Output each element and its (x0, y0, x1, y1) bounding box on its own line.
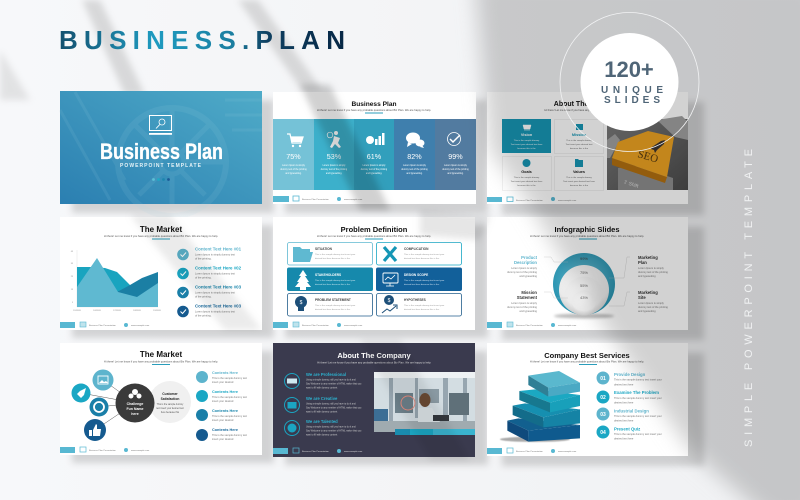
badge: 120+ unique slides (560, 12, 699, 152)
box: problem statement (288, 294, 372, 316)
card: values: This is the sample dummy (566, 176, 593, 179)
slide: infographic slides (487, 217, 688, 330)
list item 02: Content Text Here #02 (195, 266, 242, 270)
slide footer: Business Plan Presentation (302, 324, 330, 327)
label: mission statement: and typesetting (519, 309, 538, 313)
slide footer: Business Plan Presentation (516, 199, 544, 202)
label: marketing plan (638, 255, 668, 278)
slide footer: Business Plan Presentation (89, 449, 117, 452)
label: mission statement (507, 290, 538, 313)
slide heading: The Market (140, 225, 182, 234)
column 53%: dummy text of the printing (321, 168, 348, 171)
list item 03: Lorem Ipsum is simply dummy text (195, 290, 235, 294)
label: marketing site: Lorem Ipsum is simply (638, 301, 665, 305)
slide footer: www.example.com (558, 451, 576, 453)
slide shadows (72, 100, 704, 466)
slide intro: Hi there! Let me know if you have any probable questions about Biz Plan. We are happy to help. (317, 234, 431, 238)
slide footer: www.example.com (131, 325, 149, 327)
photo caption strip (395, 429, 475, 435)
slide footer: www.example.com (131, 450, 149, 452)
slide footer: www.example.com (558, 325, 576, 327)
content item 3: This is the sample dummy text (212, 414, 247, 418)
slide: company best services (487, 343, 688, 456)
card: values: Values (573, 170, 585, 174)
service 04 (596, 426, 662, 440)
box: complication: COMPLICATION (404, 247, 429, 251)
label: product description (507, 255, 538, 278)
slide footer (487, 322, 576, 328)
box: hypotheses: This is the sample dummy text insert your (404, 304, 445, 307)
list item 03 (177, 284, 242, 298)
card: vision: This is the sample dummy (514, 139, 540, 142)
card: mission: because this is the (570, 147, 589, 150)
service 02: desired text here (614, 400, 634, 404)
list item 04: Content Text Here #03 (195, 304, 242, 308)
column 61%: 61% (367, 152, 382, 161)
hub diagram: Customer (162, 392, 178, 396)
column 99%: dummy text of the printing (442, 168, 469, 171)
content item 1: insert your desired (212, 380, 234, 384)
service 04: This is the sample dummy text insert your (614, 432, 662, 436)
card: goals: This is the sample dummy (514, 176, 540, 179)
content item 2: insert your desired (212, 399, 234, 403)
slide footer (273, 196, 362, 202)
hub diagram: here because this (161, 411, 180, 414)
slide: about the company dark (273, 343, 475, 457)
card: vision: because this is the (517, 147, 536, 150)
slide: about the company cards (487, 92, 688, 204)
list item 02: of the printing. (195, 276, 212, 280)
service 01: This is the sample dummy text insert your (614, 378, 662, 382)
column 75% (273, 119, 314, 190)
slide: problem definition (273, 217, 475, 330)
feature: creative: Say Welcome to any member of HTML maker that you (306, 406, 362, 410)
content item 1: Contents Here (212, 371, 238, 375)
label: marketing plan: Marketing (638, 255, 658, 260)
column 61% (354, 119, 394, 190)
service 01 (596, 372, 662, 386)
service 03 (596, 408, 662, 422)
label: mission statement: Statement (517, 295, 538, 300)
box: problem statement: $ (300, 300, 303, 306)
slide: the market network (60, 343, 262, 455)
card: mission: This is the sample dummy (566, 139, 593, 142)
label: mission statement: dummy text of the printing (507, 305, 538, 309)
column 99% (435, 119, 476, 190)
label: mission statement: Mission (521, 290, 537, 295)
content item 4: Contents Here (212, 428, 238, 432)
feature: professional: want to fill with dummy content (306, 386, 338, 390)
area chart: 1/6/2020 (93, 310, 102, 312)
content item 2: This is the sample dummy text (212, 395, 247, 399)
column 82%: 82% (407, 152, 422, 161)
hub diagram: Fun Name (127, 407, 144, 411)
box: complication (376, 242, 462, 265)
area chart: 1/9/2020 (153, 310, 162, 312)
concentric circle chart: 99% (580, 256, 588, 261)
card: goals: because this is the (517, 184, 536, 187)
feature: talented: want to fill with dummy content (306, 434, 338, 436)
content item 3: insert your desired (212, 418, 234, 422)
hub diagram: This is the sample dummy (157, 403, 184, 406)
slide footer: Business Plan Presentation (302, 450, 330, 453)
box: stakeholders: STAKEHOLDERS (315, 273, 341, 277)
label: product description: and typesetting (519, 274, 538, 278)
content item 4: insert your desired (212, 437, 234, 441)
slide footer (487, 448, 576, 454)
content item 1: This is the sample dummy text (212, 376, 247, 380)
service 03: 03 (600, 412, 606, 418)
area chart: 15 (71, 289, 74, 291)
content item 4 (196, 428, 247, 441)
slide intro: Hi there! Let me know if you have any probable questions about Biz Plan. We are happy to help. (104, 360, 218, 364)
slide heading: About The Company (337, 351, 411, 360)
service 01: Provide Design (614, 372, 646, 377)
service 03: desired text here (614, 418, 634, 422)
slide footer (60, 322, 149, 328)
box: problem statement: desired text here because this is the. (315, 308, 351, 311)
wheel texture (60, 92, 262, 216)
column 99%: 99% (448, 152, 463, 161)
slide footer: Business Plan Presentation (516, 324, 544, 327)
column 61%: and typesetting. (366, 172, 382, 175)
card: values: Text insert your desired text here (563, 180, 596, 183)
slide heading: About The Company (554, 101, 622, 108)
service 04: Present Quiz (614, 426, 640, 432)
stacked 3D blocks (500, 371, 580, 442)
vertical tagline: SIMPLE POWERPOINT TEMPLATE (743, 149, 755, 447)
feature: talented (284, 419, 362, 436)
column 75%: and typesetting. (285, 172, 302, 175)
concentric circle chart: 43% (580, 295, 588, 300)
slide footer: www.example.com (344, 199, 362, 201)
slide intro: Hi there! Let me know if you have any probable questions about Biz Plan. (544, 108, 632, 112)
area chart: 1/8/2020 (133, 310, 142, 312)
slide footer: Business Plan Presentation (302, 198, 330, 201)
column 82%: dummy text of the printing (401, 168, 428, 171)
box: situation: SITUATION (315, 247, 333, 251)
hub diagram: text insert your desired text (156, 407, 184, 410)
concentric circle chart: 55% (580, 283, 588, 288)
column 82% (394, 119, 435, 190)
photo: SEO keyboard (607, 116, 688, 190)
hub diagram: Satisfaction (161, 397, 179, 401)
slide heading: Infographic Slides (554, 225, 620, 234)
area chart: 35 (71, 263, 74, 265)
slide intro: Hi there! Let me know if you have any probable questions about Biz Plan. We are happy to help. (530, 234, 644, 238)
feature: professional: Using a simple dummy, still you have to do it and (306, 378, 356, 382)
pagination dots (152, 178, 170, 181)
service 01: 01 (600, 376, 606, 382)
card: goals: Text insert your desired text here (511, 180, 543, 183)
feature: professional: We are Professional (306, 372, 346, 377)
list item 03: Content Text Here #03 (195, 284, 242, 290)
column 53% (314, 119, 354, 190)
slide heading: Business Plan (351, 101, 397, 108)
list item 01: Content Text Here #01 (195, 246, 242, 252)
feature: talented: Say Welcome to any member of HTML maker that you (306, 430, 362, 432)
area chart: 1/5/2020 (73, 310, 82, 312)
column 53%: 53% (327, 152, 342, 161)
service 02: 02 (600, 395, 606, 401)
service 02 (596, 390, 662, 404)
badge: 120+ unique slides: UNIQUE (601, 85, 663, 96)
column 82%: Lorem Ipsum is simply (403, 164, 427, 167)
feature: talented: We are Talented (306, 419, 338, 424)
column 53%: Lorem Ipsum is simply (323, 164, 346, 167)
label: marketing plan: and typesetting (638, 274, 656, 278)
list item 03: of the printing. (195, 294, 212, 298)
label: product description: Description (514, 260, 537, 265)
area chart (71, 250, 162, 312)
slide heading: The Market (140, 350, 182, 359)
column 61%: Lorem Ipsum is simply (363, 164, 386, 167)
slide heading: Problem Definition (341, 225, 408, 234)
service 04: 04 (600, 430, 606, 436)
photo: engineer in lab (374, 372, 475, 432)
card: goals (502, 156, 552, 190)
card: mission (554, 120, 604, 154)
label: marketing site: Marketing (638, 290, 658, 295)
content item 3 (196, 409, 247, 422)
column 75%: 75% (286, 152, 301, 161)
service 04: desired text here (614, 436, 634, 440)
content item 2: Contents Here (212, 390, 238, 394)
list item 02 (177, 266, 242, 280)
content item 1 (196, 371, 247, 384)
label: marketing plan: dummy text of the printing (638, 270, 668, 274)
card: vision (502, 119, 551, 153)
icon: laptop with magnifier (149, 116, 172, 135)
hub diagram: here (131, 412, 139, 416)
box: hypotheses (376, 294, 462, 316)
slide footer: Business Plan Presentation (516, 450, 544, 453)
title: BUSINESS.PLAN (59, 25, 345, 55)
feature: creative: We are Creative (306, 396, 338, 401)
area chart: 45 (71, 251, 74, 253)
concentric circle chart (544, 253, 630, 318)
feature: creative: Using a simple dummy, still you have to do it and (306, 402, 356, 406)
box: complication: This is the sample dummy text insert your (404, 253, 445, 256)
column 61%: dummy text of the printing (361, 168, 388, 171)
slide footer (273, 322, 362, 328)
service 02: This is the sample dummy text insert your (614, 396, 662, 400)
label: marketing plan: Lorem Ipsum is simply (638, 266, 665, 270)
box: problem statement: PROBLEM STATEMENT (315, 298, 351, 302)
content item 2 (196, 390, 247, 403)
slide intro: Hi there! Let me know if you have any probable questions about Biz Plan. We are happy to help. (104, 234, 218, 238)
box: design scope (376, 268, 462, 291)
box: hypotheses: desired text here because this is the. (404, 308, 440, 311)
label: product description: dummy text of the printing (507, 270, 538, 274)
concentric circle chart: 75% (580, 270, 588, 275)
box: design scope: desired text here because this is the. (404, 283, 440, 286)
card: values (554, 156, 604, 190)
card: goals: Goals (521, 170, 532, 174)
card: values: because this is the (570, 184, 589, 187)
column 53%: and typesetting. (326, 172, 342, 175)
badge: 120+ unique slides: 120+ (604, 57, 654, 82)
slide footer: www.example.com (344, 451, 362, 453)
photo: SEO keyboard: ⇧ Shift (622, 179, 640, 190)
service 02: Examine The Problem (614, 390, 659, 395)
slide: business plan percentages (273, 92, 476, 204)
content item 3: Contents Here (212, 409, 238, 413)
slide footer: www.example.com (344, 325, 362, 327)
label: marketing site: dummy text of the printing (638, 305, 668, 309)
area chart: 5 (72, 302, 74, 304)
column 75%: dummy text of the printing (280, 168, 307, 171)
feature: talented: Using a simple dummy, still you have to do it and (306, 426, 356, 428)
service 03: Industrial Design (614, 408, 649, 414)
box: stakeholders (287, 268, 373, 291)
box: stakeholders: This is the sample dummy text insert your (315, 279, 356, 282)
slide footer (487, 197, 576, 202)
label: marketing site (638, 290, 668, 313)
box: situation (288, 242, 372, 265)
hub diagram (72, 370, 191, 441)
slide: the market area chart (60, 217, 262, 330)
list item 04 (177, 304, 242, 318)
list item 02: Lorem Ipsum is simply dummy text (195, 272, 235, 276)
feature: creative: want to fill with dummy content (306, 410, 338, 414)
cover subtitle: POWERPOINT TEMPLATE (120, 163, 202, 169)
slide footer: Business Plan Presentation (89, 324, 117, 327)
slide intro: Hi there! Let me know if you have any probable questions about Biz Plan. We are happy to help. (530, 360, 644, 364)
card: vision: Text insert your desired text here (511, 143, 543, 146)
column 99%: Lorem Ipsum is simply (444, 164, 468, 167)
card: vision: Vision (521, 133, 533, 137)
list item 01: of the printing. (195, 256, 212, 260)
box: stakeholders: desired text here because this is the. (315, 283, 351, 286)
label: product description: Product (521, 255, 538, 260)
box: design scope: DESIGN SCOPE (404, 273, 428, 277)
label: mission statement: Lorem Ipsum is simply (511, 301, 538, 305)
content item 4: This is the sample dummy text (212, 433, 247, 437)
hub diagram: Challenge (127, 402, 143, 406)
list item 04: of the printing. (195, 314, 212, 318)
slide footer (60, 447, 149, 453)
card: mission: Mission (572, 133, 587, 137)
box: situation: This is the sample dummy text insert your (315, 253, 356, 256)
list item 01 (177, 246, 242, 260)
feature: professional: Say Welcome to any member of HTML maker that you (306, 382, 362, 386)
cover heading: Business Plan (100, 139, 223, 164)
label: product description: Lorem Ipsum is simply (511, 266, 538, 270)
box: hypotheses: $ (388, 298, 391, 304)
slide heading: Company Best Services (544, 351, 630, 360)
feature: creative (284, 396, 362, 414)
column 75%: Lorem Ipsum is simply (282, 164, 306, 167)
label: marketing site: and typesetting (638, 309, 656, 313)
area chart: 1/7/2020 (113, 310, 122, 312)
list item 04: Lorem Ipsum is simply dummy text (195, 310, 235, 314)
label: marketing site: Site (638, 295, 646, 300)
badge: 120+ unique slides: SLIDES (604, 95, 660, 106)
service 01: desired text here (614, 382, 634, 386)
box: complication: desired text here because this is the. (404, 257, 440, 260)
slide intro: Hi there! Let me know if you have any probable questions about Biz Plan. We are happy to help. (317, 108, 431, 112)
photo: SEO keyboard: SEO (636, 148, 660, 166)
box: problem statement: This is the sample dummy text insert your (315, 304, 356, 307)
column 82%: and typesetting. (406, 172, 423, 175)
list item 01: Lorem Ipsum is simply dummy text (195, 252, 235, 256)
slide intro: Hi there! Let me know if you have any probable questions about Biz Plan. We are happy to help (317, 360, 431, 364)
card: mission: Text insert your desired text (566, 143, 593, 146)
feature: professional (284, 372, 362, 390)
slide: cover (60, 91, 262, 216)
column 99%: and typesetting. (447, 172, 464, 175)
label: marketing plan: Plan (638, 260, 647, 265)
service 03: This is the sample dummy text insert your (614, 414, 662, 418)
area chart: 25 (71, 276, 74, 278)
slide footer (273, 448, 362, 454)
box: situation: desired text here because this is the. (315, 257, 351, 260)
box: hypotheses: HYPOTHESES (404, 298, 426, 302)
box: design scope: This is the sample dummy text insert your (404, 279, 445, 282)
slide footer: www.example.com (558, 200, 576, 202)
